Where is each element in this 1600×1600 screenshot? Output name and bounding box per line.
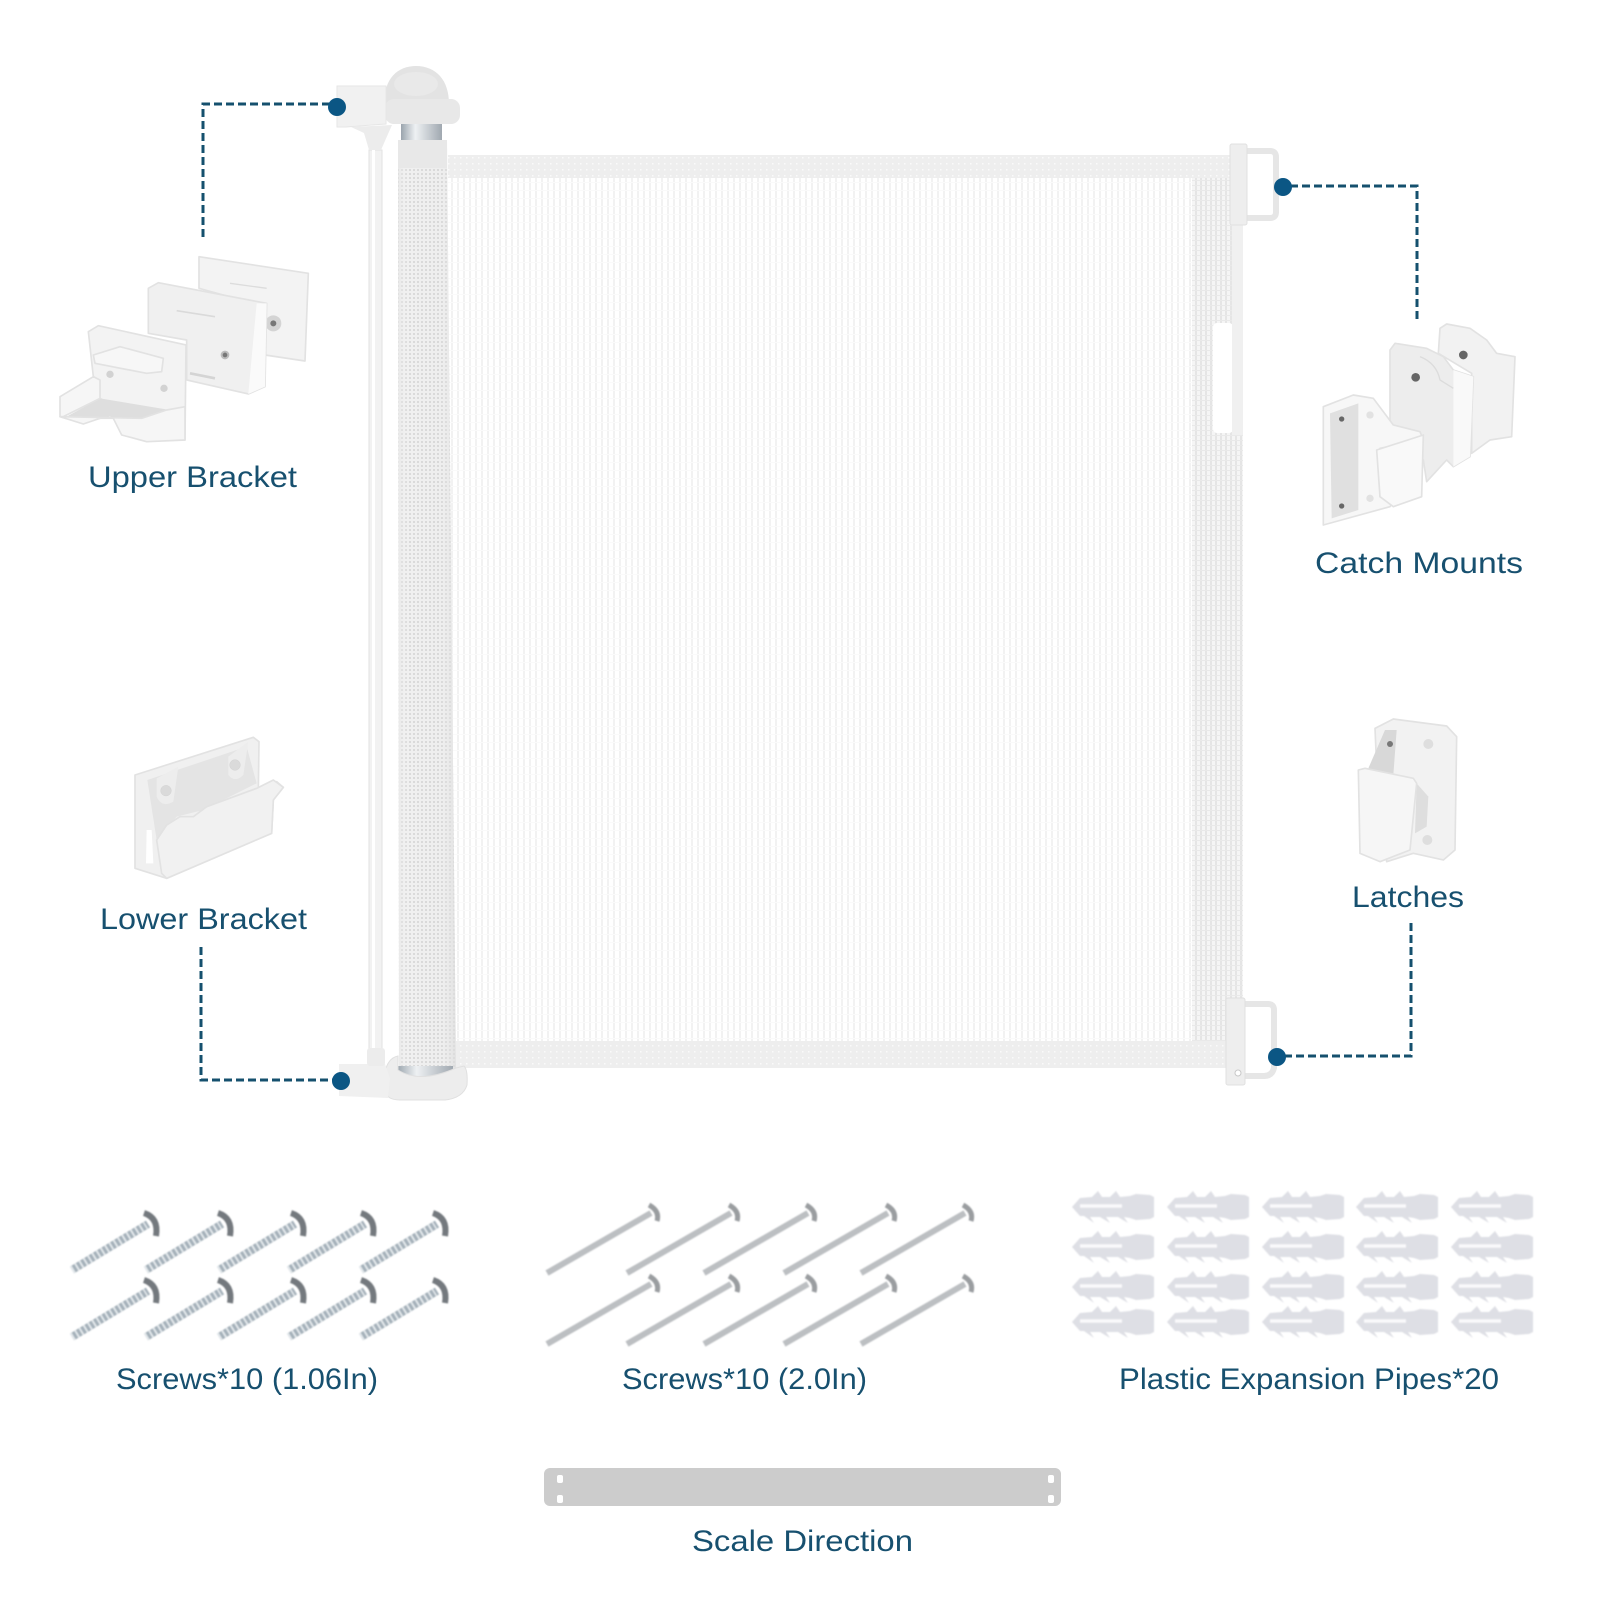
icon: catch mounts parts <box>1323 324 1515 525</box>
icon: lower bracket part <box>135 737 283 878</box>
lower bracket on gate <box>339 1048 390 1098</box>
callout: catch mounts connector <box>1274 178 1417 320</box>
callout: latches connector <box>1268 923 1411 1066</box>
mesh right edge band <box>1192 178 1243 1041</box>
label: plastic expansion pipes: Plastic Expansion Pipes*20 <box>1119 1363 1499 1396</box>
mesh panel <box>448 175 1198 1043</box>
gate assembly <box>337 66 1276 1100</box>
label: Upper Bracket: Upper Bracket <box>88 461 298 494</box>
label: long screws: Screws*10 (2.0In) <box>622 1363 867 1396</box>
label: Catch Mounts: Catch Mounts <box>1315 547 1523 580</box>
bottom right handle <box>1226 998 1274 1085</box>
label: Latches: Latches <box>1352 881 1464 914</box>
mesh top band <box>448 155 1230 178</box>
label: Lower Bracket: Lower Bracket <box>100 903 308 936</box>
icon: latch part <box>1358 719 1457 862</box>
label: Scale Direction: Scale Direction <box>692 1525 913 1558</box>
upper bracket on gate <box>337 86 392 150</box>
top right handle <box>1230 144 1276 225</box>
side rod <box>369 150 382 1065</box>
label: short screws: Screws*10 (1.06In) <box>116 1363 378 1396</box>
top cap <box>384 66 460 124</box>
icon: plastic expansion pipes <box>1072 1191 1533 1338</box>
bottom metal axle <box>397 1066 453 1080</box>
bottom cap <box>385 1056 467 1100</box>
icon: upper bracket parts <box>60 257 308 442</box>
mesh bottom band <box>456 1041 1228 1068</box>
callout: lower bracket connector <box>201 947 350 1090</box>
icon: long screws <box>547 1205 972 1344</box>
icon: scale direction bar <box>544 1468 1061 1506</box>
roller <box>398 140 456 1072</box>
metal axle top <box>401 123 442 140</box>
icon: short screws <box>72 1213 446 1337</box>
callout: upper bracket connector <box>203 98 346 237</box>
